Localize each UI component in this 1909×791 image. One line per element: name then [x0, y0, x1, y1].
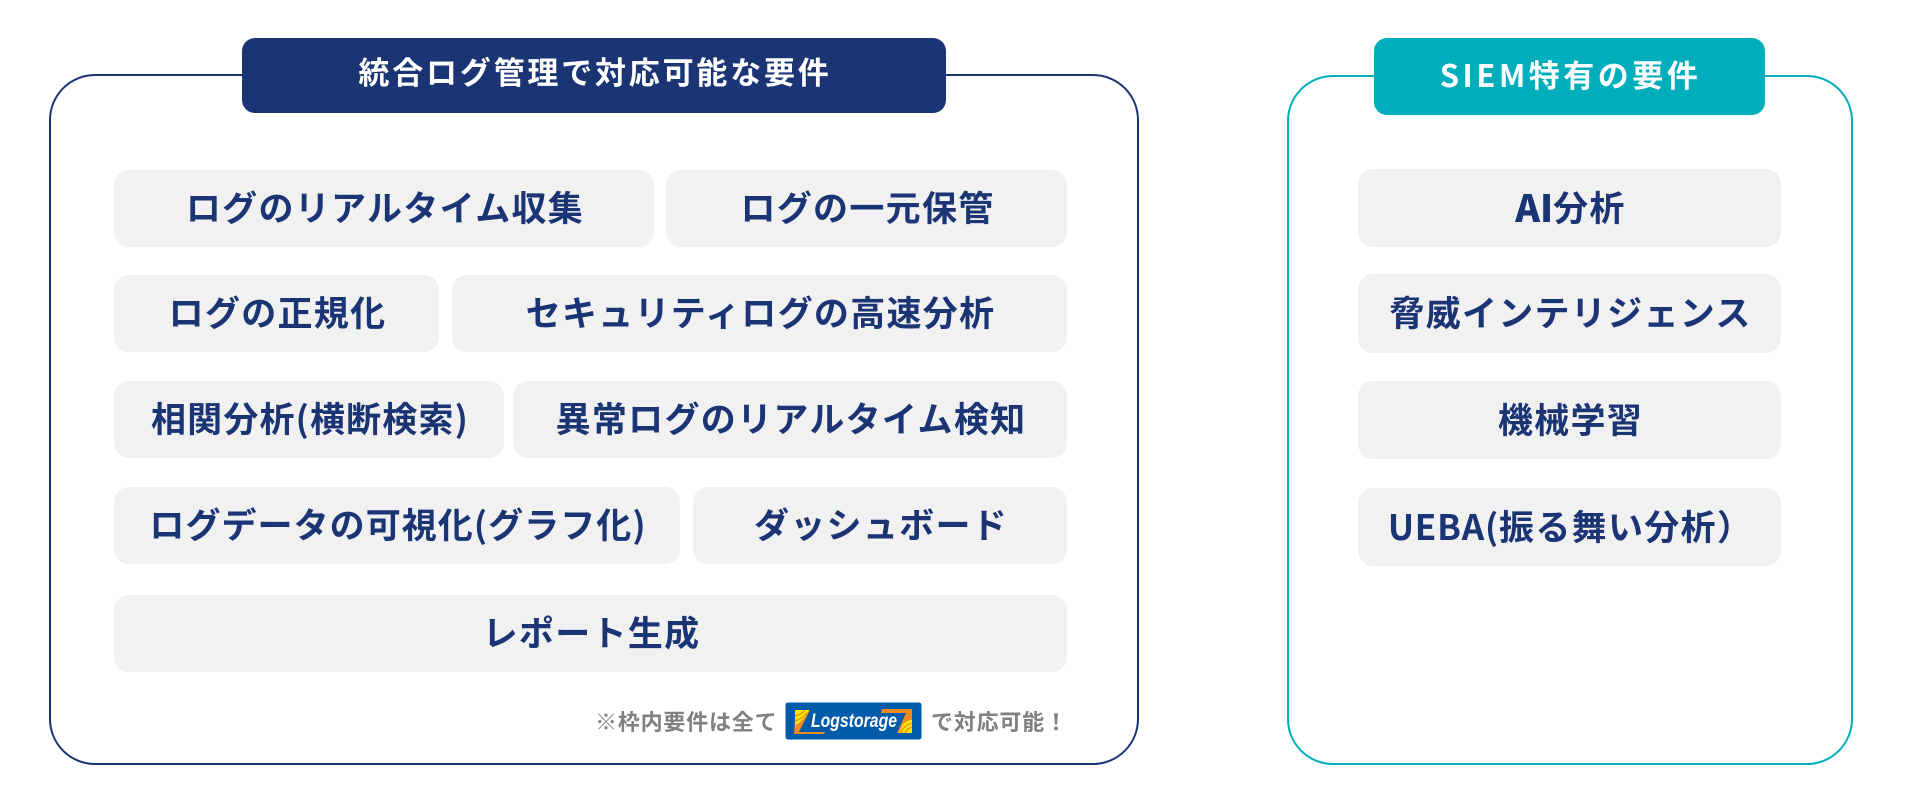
item: report generation: [114, 595, 1067, 672]
item: AI analysis: AI: [1515, 178, 1553, 233]
item: real-time log collection: [114, 170, 654, 247]
item: log data visualization: [114, 487, 680, 564]
item: UEBA behavior analysis: UEBA(: [1388, 500, 1499, 550]
panel: SIEM-specific requirements: [1287, 38, 1853, 765]
item: AI analysis: 分析: [1553, 180, 1626, 232]
item: real-time anomaly detection: [513, 381, 1067, 458]
item: dashboard: [693, 487, 1067, 564]
item: UEBA behavior analysis: [1358, 488, 1781, 566]
item: correlation analysis: [114, 381, 504, 458]
item: threat intelligence: 脅威インテリジェンス: [1389, 286, 1752, 337]
item: log data visualization: ログデータの可視化(グラフ化): [149, 498, 647, 549]
icon: Logstorage logo: [786, 702, 922, 740]
footnote text: after logo: で対応可能！: [931, 705, 1068, 737]
item: dashboard: ダッシュボード: [754, 498, 1008, 549]
item: real-time log collection: ログのリアルタイム収集: [186, 181, 584, 232]
icon: Logstorage logo: Logstorage: [811, 711, 897, 732]
heading: unified log management: [242, 38, 946, 113]
item: centralized log storage: ログの一元保管: [740, 181, 995, 232]
heading: SIEM-specific requirements: [1374, 38, 1765, 115]
heading: SIEM-specific requirements: SIEM特有の要件: [1440, 51, 1701, 96]
item: correlation analysis: 相関分析(横断検索): [151, 392, 469, 443]
item: threat intelligence: [1358, 274, 1781, 353]
footnote text: before logo: ※枠内要件は全て: [595, 705, 777, 737]
footnote: all requirements supported by Logstorage: [595, 702, 1068, 740]
panel outline: unified log management: [49, 74, 1139, 765]
item: log normalization: ログの正規化: [169, 286, 386, 337]
item: AI analysis: [1358, 169, 1781, 247]
item: real-time anomaly detection: 異常ログのリアルタイム検知: [556, 392, 1026, 443]
item: fast security log analysis: [452, 275, 1067, 352]
item: machine learning: [1358, 381, 1781, 459]
item: log normalization: [114, 275, 439, 352]
item: fast security log analysis: セキュリティログの高速分析: [526, 286, 995, 337]
panel: unified log management requirements: [49, 38, 1139, 765]
item: machine learning: 機械学習: [1498, 392, 1643, 444]
heading: unified log management: 統合ログ管理で対応可能な要件: [358, 48, 832, 93]
panel outline: SIEM: [1287, 75, 1853, 765]
item: report generation: レポート生成: [483, 606, 700, 657]
item: UEBA behavior analysis: 振る舞い分析）: [1499, 500, 1753, 550]
item: centralized log storage: [666, 170, 1067, 247]
